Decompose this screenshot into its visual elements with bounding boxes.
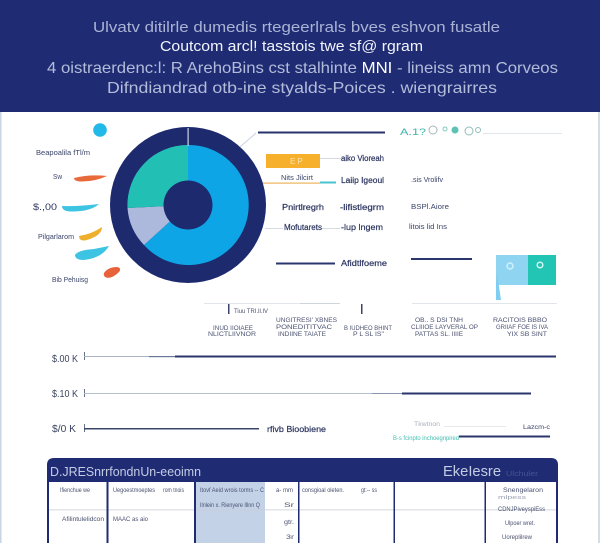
row 3: -lifistlegrm <box>340 203 384 212</box>
table cells: Itovf Aeid wrois torms -- C <box>200 487 264 494</box>
label 1: Beapoalila fTl/m <box>36 148 90 157</box>
table title right: EkeIesre <box>443 463 501 480</box>
table panel <box>47 458 558 543</box>
caption 5 <box>493 317 549 338</box>
centre hole <box>164 180 212 230</box>
segment: blue <box>144 145 249 265</box>
top callout line <box>240 132 385 147</box>
caption 4 <box>411 317 478 338</box>
column divider rule <box>204 303 557 304</box>
column captions <box>208 304 549 338</box>
table cells: Uegoestmoeptes <box>113 487 156 494</box>
left labels and swooshes <box>33 148 120 284</box>
icon: cyan dot <box>93 123 107 137</box>
bar row 2: $.10 K <box>52 389 78 400</box>
table cells: gt:-- ss <box>361 487 378 494</box>
legend <box>393 421 551 442</box>
row 5 label with rule: Afidtlfoeme <box>341 259 388 268</box>
yellow highlight tag: E P <box>290 157 303 166</box>
short rule <box>411 258 472 260</box>
legend: Lazcm-c <box>523 424 551 431</box>
header banner <box>0 0 600 112</box>
caption 1: INUD IIOIAEE <box>213 325 254 332</box>
table row rule <box>48 508 557 511</box>
yellow highlight tag <box>266 154 320 168</box>
caption 1: Tiuu TRI.lI.lV <box>234 308 269 315</box>
icon tiles <box>496 255 556 300</box>
row 2: Laiip Igeoul <box>341 176 384 185</box>
caption 3: P L SL IS" <box>353 331 385 338</box>
table cells: Afilintulelidcon <box>62 516 104 523</box>
row 1 label: aiko Vioreah <box>341 154 384 163</box>
row 4: -lup lngem <box>341 223 383 232</box>
row 4: Mofutarets <box>284 223 322 232</box>
legend: Tkwtnon <box>414 421 440 428</box>
table column rules <box>47 482 558 543</box>
label 2: Sw <box>53 172 63 181</box>
bar row 3 <box>52 424 327 435</box>
caption 2: UNGITRESI' XBNES <box>276 317 338 324</box>
legend: B-s fcinpto inchoegnpired <box>393 435 459 442</box>
caption 4: OB.. S DSI TNH <box>415 317 463 324</box>
bar row 3: rfivb Bioobiene <box>267 425 327 434</box>
header line 4: Difndiandrad otb-ine styalds-Poices . wiengrairres <box>107 80 497 97</box>
table cells: Uoreplilrew <box>502 534 532 541</box>
header line 3: 4 oistraerdenc:l: R ArehoBins cst stalhinte MNI - lineiss amn Corveos <box>47 60 558 77</box>
bar chart <box>52 352 556 435</box>
table cells: 3r <box>286 534 295 541</box>
caption 1: NLICTLIIVNOR <box>208 331 256 338</box>
row 3: BSPl.Aiore <box>411 202 449 211</box>
swoosh: cyan lower <box>75 246 109 260</box>
row 3 <box>282 202 449 212</box>
table cells: Sr <box>284 502 295 509</box>
swoosh: red <box>104 267 120 278</box>
header line 1: Ulvatv ditilrle dumedis rtegeerlrals bves eshvon fusatle <box>93 20 500 36</box>
table cells: CDNJPiveyspiEss <box>498 506 546 513</box>
table cells: Ilnlein x. Rienyere Illnn Q <box>200 502 260 509</box>
swoosh: cyan <box>62 204 99 212</box>
swoosh: yellow <box>79 227 102 241</box>
caption 5: RACITOIS BBBO <box>493 317 547 324</box>
teal heading with icons: A.1? <box>400 127 426 137</box>
row 5 label with rule <box>276 259 388 268</box>
table cells: Ifienchue we <box>60 487 90 494</box>
table header <box>47 458 558 482</box>
shaded column <box>196 482 265 543</box>
table cells: MAAC as aio <box>113 516 148 523</box>
row 4: litois lid Ins <box>409 222 447 231</box>
label 5: Bib Pehuisg <box>52 275 88 284</box>
caption 1 <box>208 304 269 338</box>
row 2 <box>263 173 443 185</box>
donut chart <box>110 127 266 283</box>
caption 4: CLIIIOE LAYVERAL OP <box>411 324 478 331</box>
caption 5: YIX SB SINT <box>507 331 547 338</box>
caption 2 <box>276 317 338 338</box>
table cells: Ulpoer wret. <box>505 520 535 527</box>
icon: star outline <box>507 263 513 269</box>
table cells: rom tnois <box>163 487 185 494</box>
tag: Nits Jilcirt <box>281 173 314 182</box>
label 3: $.,00 <box>33 202 57 213</box>
caption 4: PATTAS SL. IIIIE <box>415 331 464 338</box>
icon: badge <box>537 262 543 268</box>
table cells: mlpess <box>498 495 526 501</box>
row 3: Pnirtlregrh <box>282 203 324 212</box>
row 4 <box>265 222 447 232</box>
caption 2: PONEDITITVAC <box>276 324 332 331</box>
header line 2: Coutcom arcl! tasstois twe sf@ rgram <box>160 39 423 55</box>
row 2: .sis Vrolifv <box>411 175 443 184</box>
teal heading with icons <box>400 126 562 137</box>
segment: lavender <box>128 205 188 245</box>
bar row 3: $/0 K <box>52 424 76 435</box>
label 4: Pilgarlarom <box>38 232 74 241</box>
swoosh: orange <box>74 175 107 182</box>
row 1 label <box>320 154 384 163</box>
segment: teal <box>127 145 188 208</box>
caption 3 <box>344 304 392 338</box>
table panel: Ulchuler <box>506 471 539 478</box>
table cells: a- mm <box>276 487 293 494</box>
caption 2: INDIINE TAIATE <box>278 331 327 338</box>
table cells: consgioal oleten. <box>302 487 344 494</box>
bar row 1: $.00 K <box>52 354 78 365</box>
caption 5: GRIIAF FOE IS IVA <box>496 324 549 331</box>
table cells: gtr. <box>284 519 294 526</box>
table title left: D.JRESnrrfondnUn-eeoimn <box>50 464 201 479</box>
table cells: Snengelaron <box>503 487 543 494</box>
table cells <box>60 487 546 541</box>
page borders <box>0 112 600 543</box>
caption 3: B IUDHEO BHINT <box>344 325 392 332</box>
